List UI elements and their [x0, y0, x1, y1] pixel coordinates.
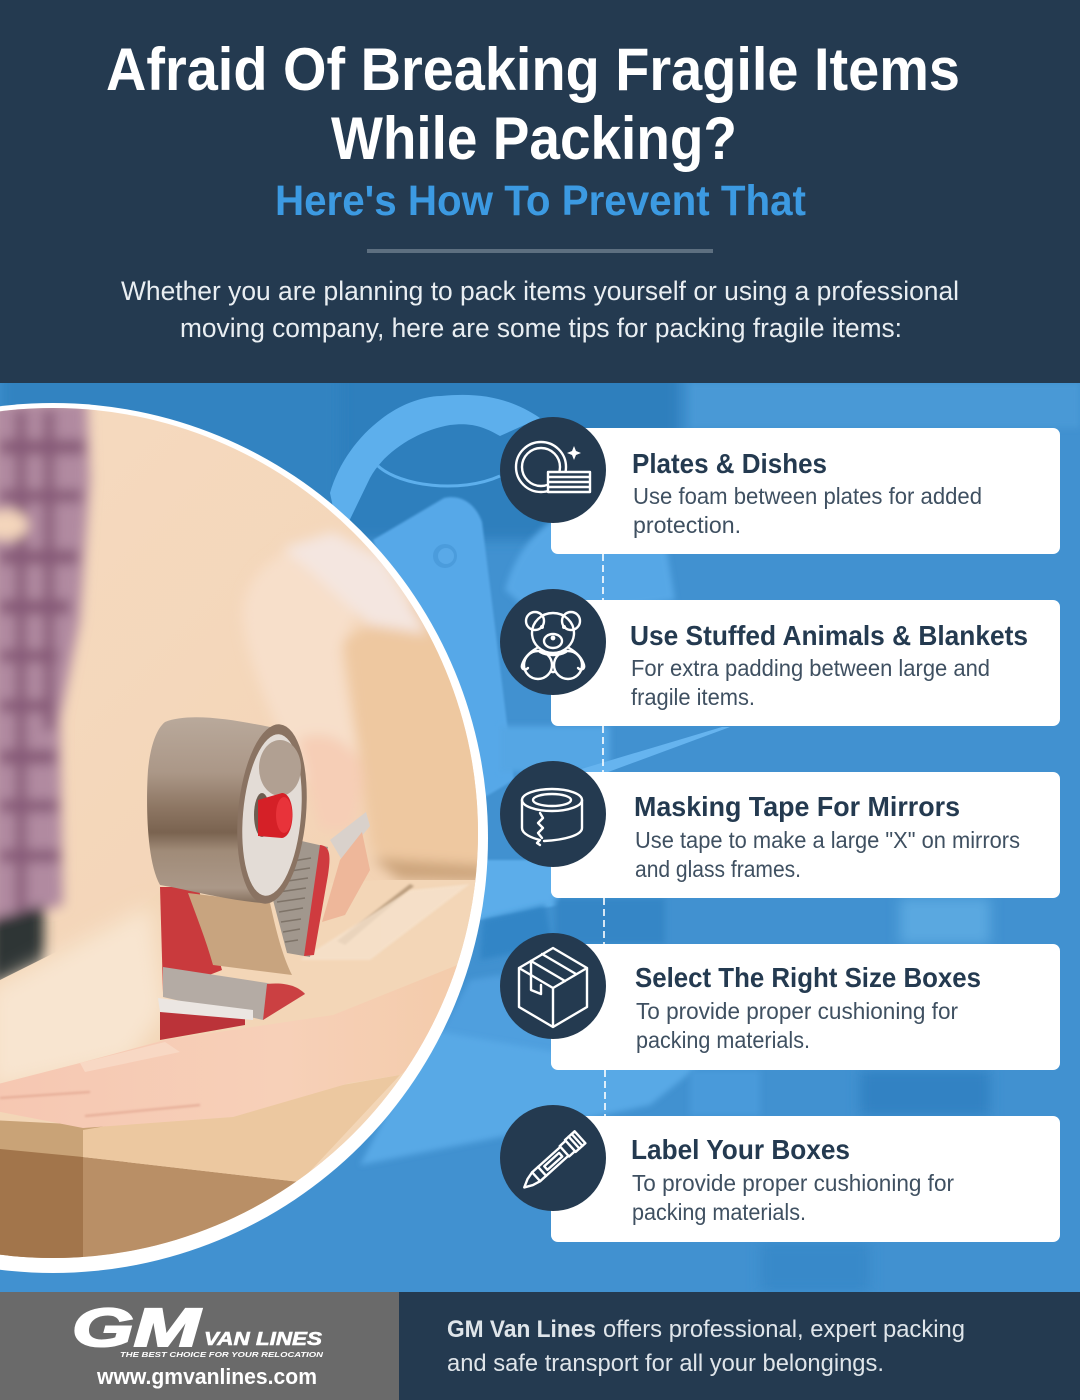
- logo: GM Van Lines: GM: [72, 1298, 201, 1358]
- body text: Use foam between plates for added: [633, 483, 982, 509]
- heading: Plates & Dishes: [632, 448, 827, 479]
- body text: packing materials.: [632, 1199, 806, 1225]
- person in plaid shirt: [0, 400, 90, 925]
- title: [106, 36, 960, 172]
- intro paragraph: Whether you are planning to pack items yourself or using a professional: [121, 276, 959, 306]
- icon badge: box: [500, 933, 606, 1039]
- photo: hands taping a cardboard box: [0, 400, 500, 1270]
- bottom roller: [163, 967, 305, 1020]
- body text: Use tape to make a large "X" on mirrors: [635, 827, 1020, 853]
- heading: Use Stuffed Animals & Blankets: [630, 620, 1028, 651]
- logo: GM Van Lines: THE BEST CHOICE FOR YOUR RELOCATION: [120, 1350, 324, 1359]
- body text: [632, 1170, 954, 1225]
- website: www.gmvanlines.com: [96, 1364, 317, 1389]
- panel: card masking tape: [500, 761, 1060, 898]
- logo: GM Van Lines: VAN LINES: [204, 1329, 322, 1349]
- body text: and glass frames.: [635, 856, 801, 882]
- heading: Select The Right Size Boxes: [635, 962, 981, 993]
- logo: GM Van Lines: [72, 1298, 324, 1359]
- body text: [633, 483, 982, 538]
- panel: footer logo: [0, 1292, 399, 1400]
- body text: [636, 998, 958, 1053]
- panel: footer message: [399, 1292, 1080, 1400]
- panel: footer message: and safe transport for all your belongings.: [447, 1350, 884, 1377]
- body text: [635, 827, 1020, 882]
- tape roll: [147, 717, 270, 903]
- title: Afraid Of Breaking Fragile Items: [106, 36, 960, 103]
- icon badge: teddy bear: [500, 589, 606, 695]
- panel: footer message: GM Van Lines: [447, 1316, 596, 1343]
- panel: card right size boxes: [500, 933, 1060, 1070]
- body text: fragile items.: [631, 684, 755, 710]
- connector: dashed lines between cards: [603, 554, 605, 1116]
- subtitle: Here's How To Prevent That: [275, 177, 806, 225]
- icon badge: marker pen: [500, 1105, 606, 1211]
- white ring around photo: [0, 403, 488, 1273]
- tape strip: [188, 893, 292, 975]
- body text: For extra padding between large and: [631, 655, 990, 681]
- tape dispenser frame: [160, 887, 222, 993]
- panel: card stuffed animals: [500, 589, 1060, 726]
- body text: To provide proper cushioning for: [636, 998, 958, 1024]
- box front: [0, 1157, 296, 1258]
- panel: header background: [0, 0, 1080, 383]
- body text: protection.: [633, 512, 741, 538]
- upper arm: [244, 554, 358, 753]
- heading: Label Your Boxes: [631, 1134, 850, 1165]
- back box: [343, 560, 490, 868]
- heading: Masking Tape For Mirrors: [634, 791, 960, 822]
- icon badge: tape roll: [500, 761, 606, 867]
- panel: card plates and dishes: [500, 417, 1060, 554]
- title: While Packing?: [331, 105, 737, 172]
- icon badge: plates: [500, 417, 606, 523]
- body text: packing materials.: [636, 1027, 810, 1053]
- body text: [631, 655, 990, 710]
- lower arm and hand: [0, 964, 480, 1128]
- box top surface: [0, 880, 500, 1220]
- body text: To provide proper cushioning for: [632, 1170, 954, 1196]
- intro paragraph: [121, 276, 959, 343]
- intro paragraph: moving company, here are some tips for packing fragile items:: [180, 313, 902, 343]
- panel: blue tape dispenser background: [0, 370, 1080, 1292]
- panel: footer message: offers professional, expert packing: [603, 1316, 965, 1343]
- handle: [273, 840, 328, 957]
- panel: card label boxes: [500, 1105, 1060, 1242]
